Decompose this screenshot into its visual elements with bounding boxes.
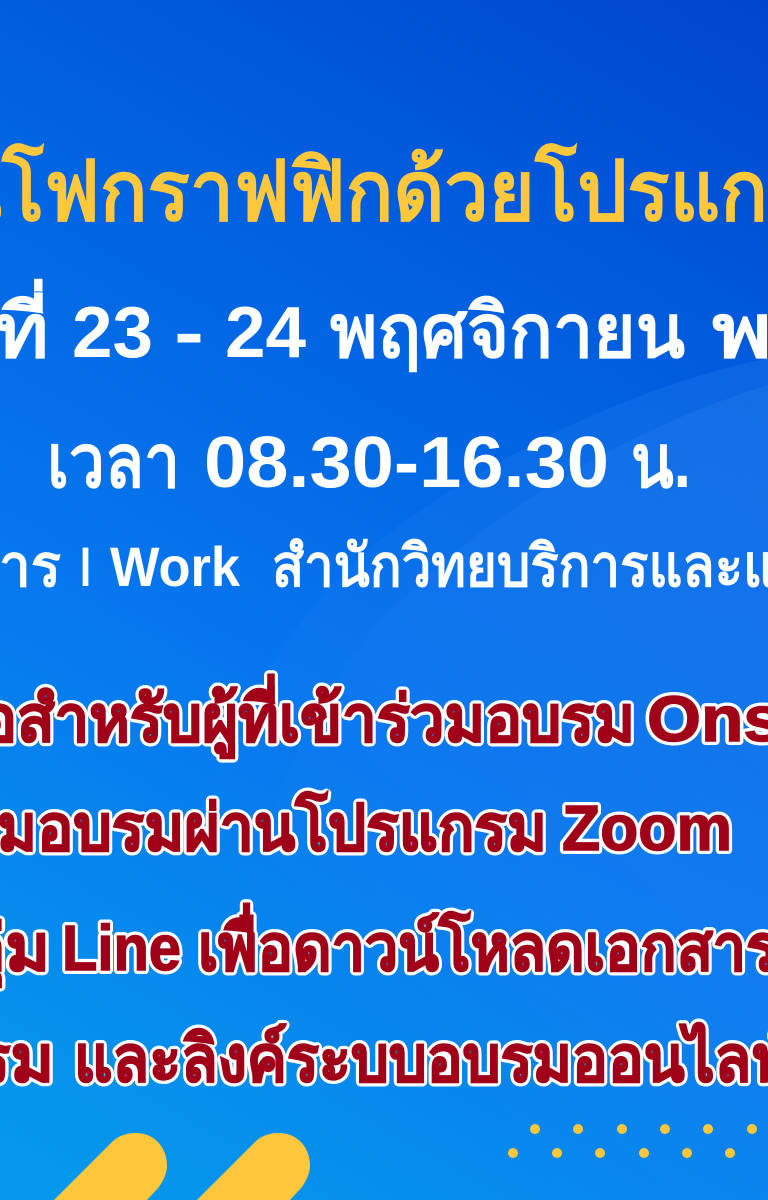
notice: zoom: Zoom — [562, 792, 732, 864]
notice: onsite: อสำหรับผู้ที่เข้าร่วมอบรม — [0, 674, 635, 759]
background swoosh — [0, 358, 768, 1200]
venue line — [0, 534, 768, 599]
notice: line group — [0, 903, 768, 988]
venue line: Work — [110, 535, 241, 598]
date line — [0, 278, 768, 373]
time line: น. — [631, 419, 691, 503]
date line: - — [174, 293, 204, 373]
time line: 08.30-16.30 — [204, 423, 609, 503]
notice: zoom: มอบรมผ่านโปรแกรม — [0, 790, 547, 864]
date line: พ — [712, 289, 768, 373]
notice: onsite: Ons — [647, 683, 768, 755]
notice: onsite: Ons — [647, 683, 768, 755]
time line — [47, 419, 691, 503]
notice: zoom: Zoom — [562, 792, 732, 864]
notice: zoom: มอบรมผ่านโปรแกรม — [0, 790, 547, 864]
notice: line group: Line — [62, 912, 181, 984]
notice: line group: Line — [62, 912, 181, 984]
date line: 24 — [225, 293, 306, 373]
notice: onsite: อสำหรับผู้ที่เข้าร่วมอบรม — [0, 674, 635, 759]
date line: 23 — [72, 293, 153, 373]
date line: พฤศจิกายน — [330, 289, 685, 373]
decorative dots — [508, 1124, 757, 1158]
time line: เวลา — [47, 419, 180, 503]
decorative yellow bars — [54, 1133, 310, 1200]
venue line: I — [80, 535, 91, 598]
